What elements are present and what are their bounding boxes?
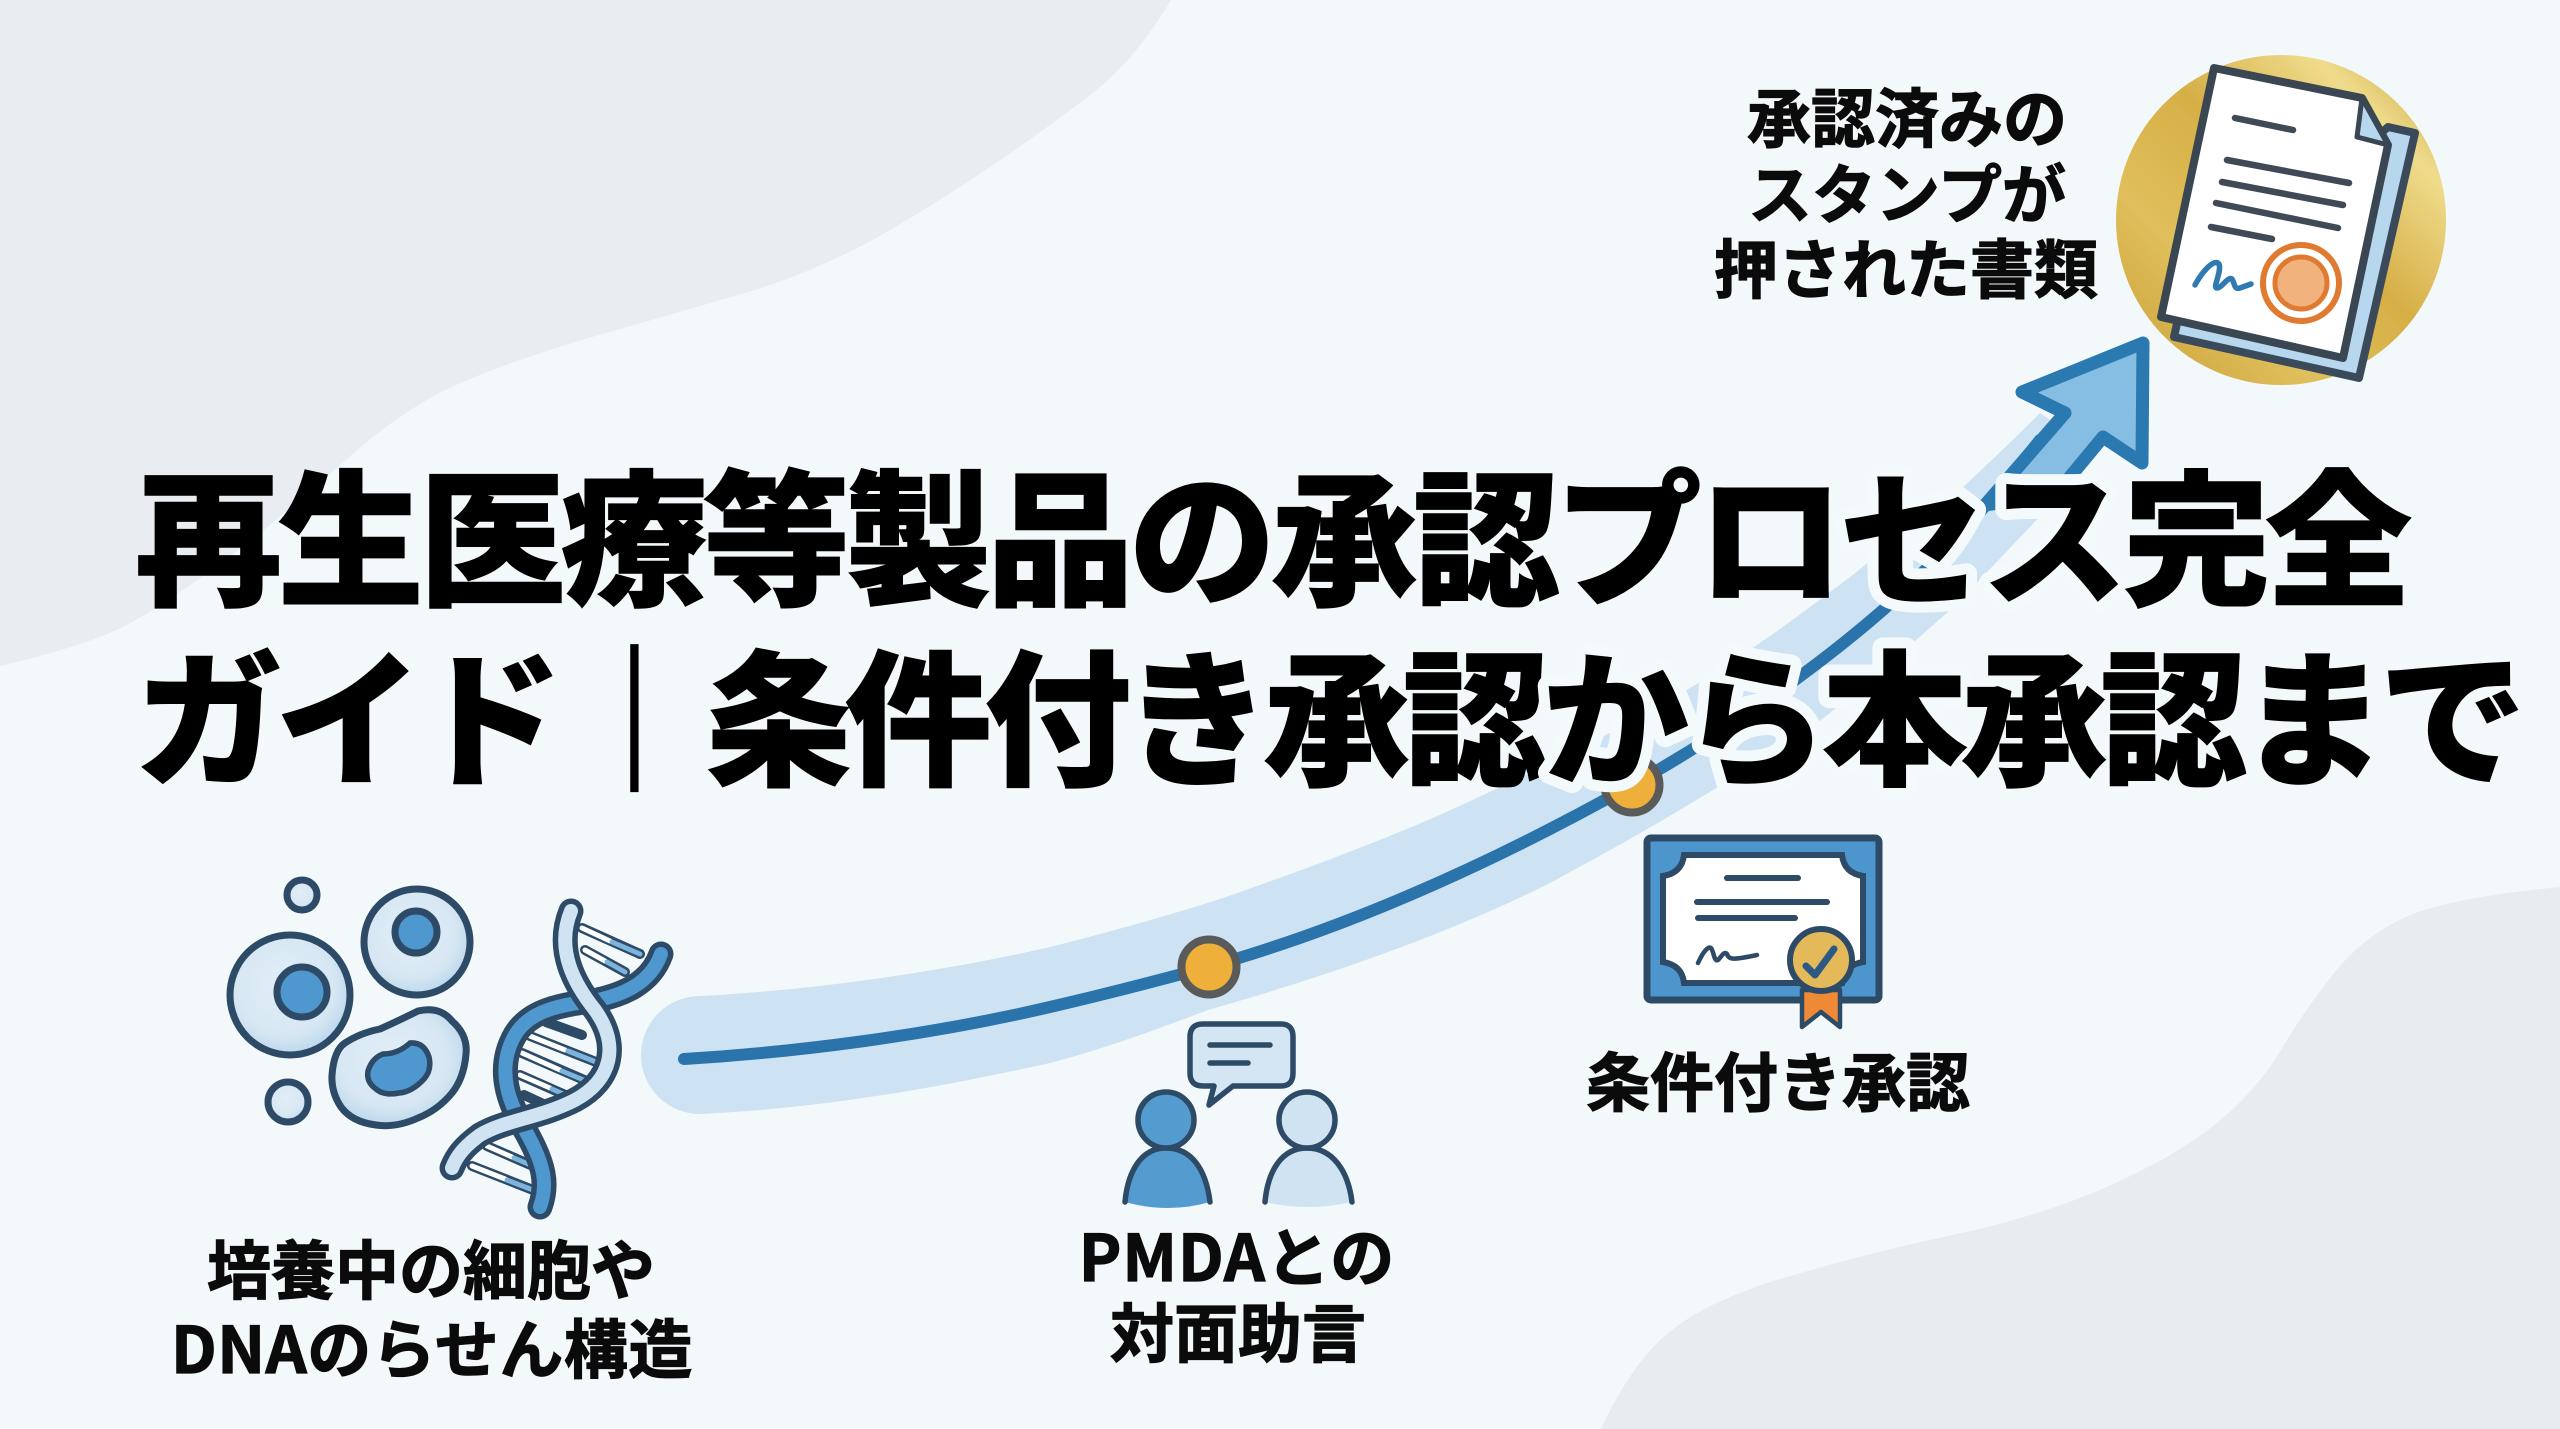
milestone node: conditional approval <box>1604 758 1660 812</box>
label: PMDA consultation: 対面助言 <box>1110 1284 1366 1376</box>
label: cells and DNA: 培養中の細胞や <box>207 1221 655 1313</box>
label: approved document <box>1714 69 2098 312</box>
label: PMDA consultation <box>1079 1208 1395 1376</box>
arrow head <box>1985 343 2143 505</box>
label: approved document: スタンプが <box>1748 145 2066 237</box>
title: ガイド｜条件付き承認から本承認まで <box>135 604 2519 817</box>
label: conditional approval: 条件付き承認 <box>1586 1033 1970 1125</box>
label: approved document: 承認済みの <box>1747 69 2067 161</box>
icon: certificate with ribbon badge <box>1647 838 1879 1027</box>
icon: approved document on gold disc <box>2116 55 2446 385</box>
label: approved document: 押された書類 <box>1714 220 2098 312</box>
icon: DNA helix <box>452 911 661 1207</box>
label: cells and DNA <box>171 1221 693 1392</box>
milestone node: PMDA <box>1182 940 1236 994</box>
title: 再生医療等製品の承認プロセス完全 <box>135 424 2411 637</box>
label: cells and DNA: DNAのらせん構造 <box>171 1300 693 1392</box>
label: PMDA consultation: PMDAとの <box>1079 1208 1395 1300</box>
icon: two people with speech bubble <box>1125 1024 1352 1208</box>
progress path ribbon <box>641 413 2095 1114</box>
icon: cells <box>230 880 470 1126</box>
title <box>135 424 2519 817</box>
